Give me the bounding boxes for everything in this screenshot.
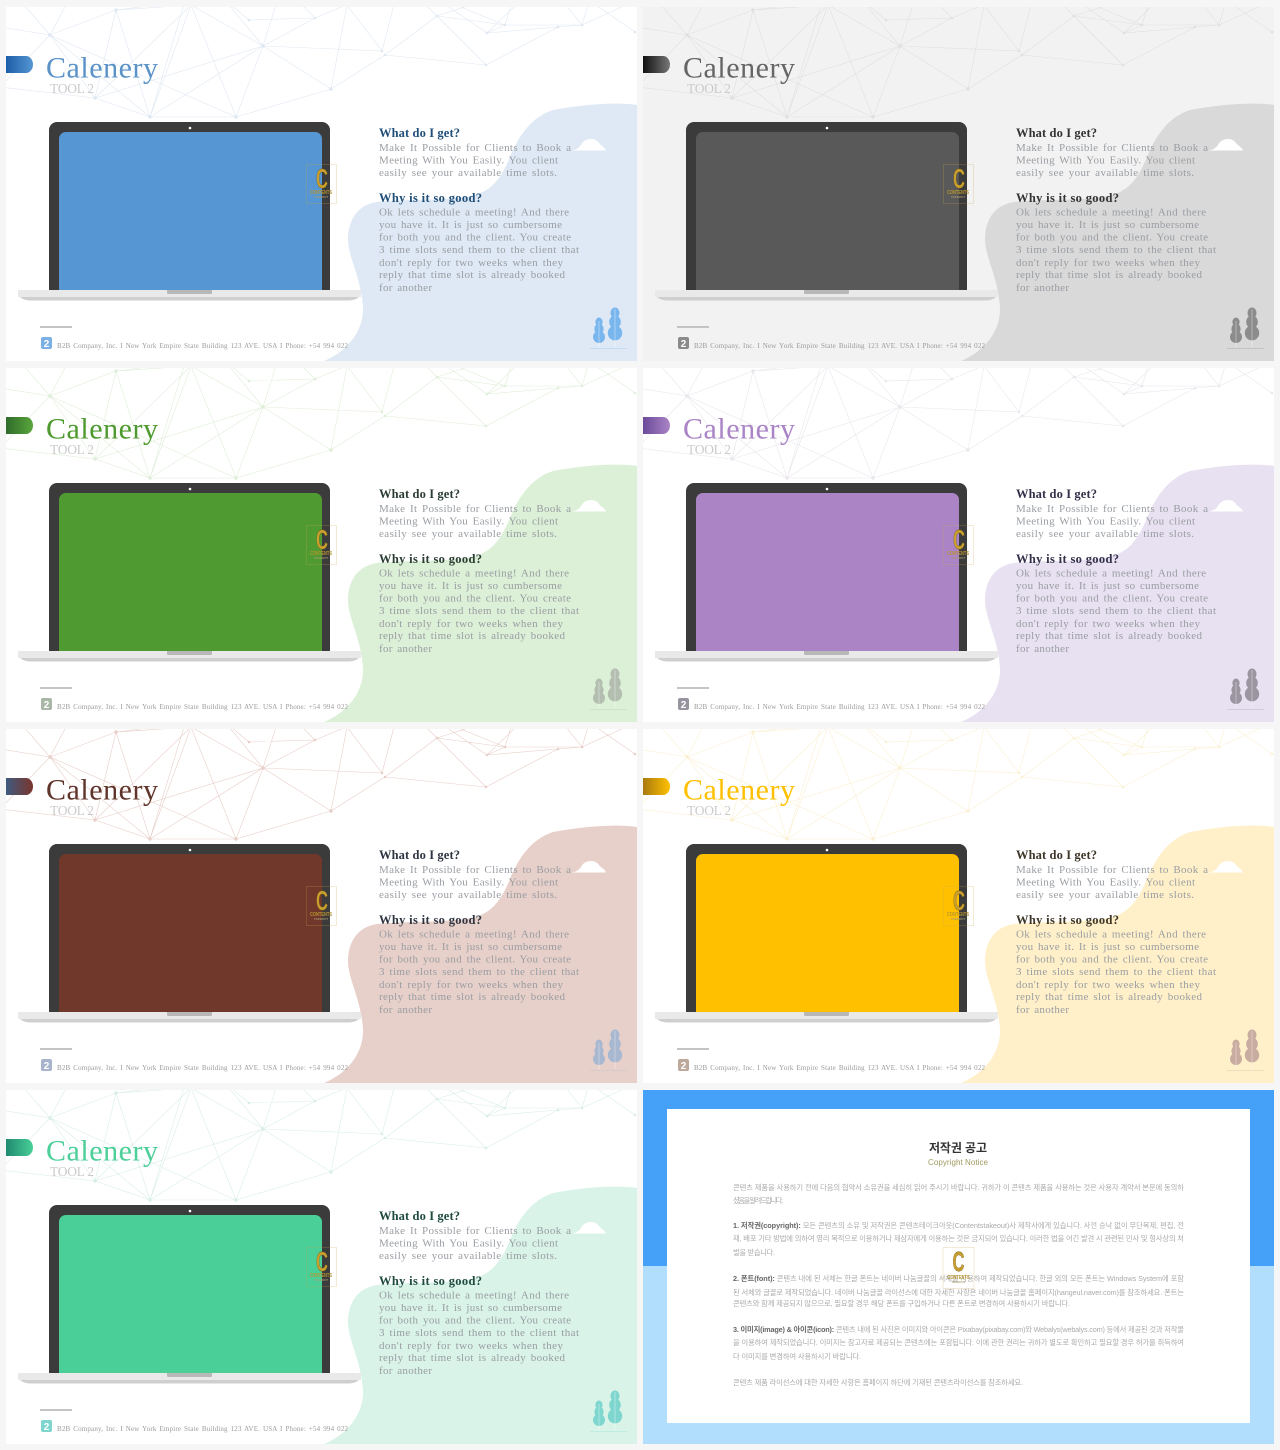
footer: 2 (44, 1422, 50, 1433)
laptop (655, 844, 998, 1022)
text block: reply that time slot is already booked (1016, 991, 1202, 1003)
watermark logo: TAKEOUT (952, 1280, 966, 1284)
subtitle: TOOL 2 (50, 81, 94, 96)
cloud icon (1208, 139, 1243, 150)
footer: 2 (681, 1061, 687, 1072)
copyright heading: 저작권 공고 (929, 1140, 987, 1155)
text block: for another (379, 282, 432, 294)
text block: reply that time slot is already booked (1016, 269, 1202, 281)
text block: for both you and the client. You create (1016, 954, 1208, 966)
text block: don't reply for two weeks when they (1016, 618, 1200, 630)
footer: 2 (681, 339, 687, 350)
text block: Ok lets schedule a meeting! And there (379, 929, 569, 941)
text block: Meeting With You Easily. You client (379, 1238, 558, 1250)
text block (379, 848, 579, 1016)
laptop (655, 122, 998, 300)
text block: Make It Possible for Clients to Book a (1016, 503, 1208, 515)
background blob (324, 465, 637, 722)
text block: you have it. It is just so cumbersome (379, 580, 562, 592)
watermark logo (944, 524, 974, 564)
network pattern (0, 5, 636, 119)
text block: Meeting With You Easily. You client (379, 877, 558, 889)
network pattern (0, 366, 636, 480)
watermark logo: C (953, 885, 965, 916)
text block: for another (379, 1004, 432, 1016)
text block: you have it. It is just so cumbersome (379, 1302, 562, 1314)
text block: What do I get? (1016, 126, 1097, 140)
copyright body text: 을 이용하여 제작되었습니다. 이미지는 참고자료 제공되는 콘텐츠에는 포함됩니다. 이에 관한 권리는 귀하가 별도로 확인하고 필요할 경우 허가를 취득하여 (733, 1338, 1184, 1347)
text block: What do I get? (379, 126, 460, 140)
watermark logo (306, 885, 336, 926)
text block: reply that time slot is already booked (379, 991, 566, 1003)
text block: don't reply for two weeks when they (1016, 257, 1200, 269)
title tab (6, 778, 33, 795)
copyright body text (733, 1183, 1184, 1387)
cloud icon (571, 500, 606, 512)
text block: Meeting With You Easily. You client (379, 155, 558, 167)
footer (40, 1048, 348, 1072)
watermark logo: CONTENTS (310, 551, 333, 557)
subtitle: TOOL 2 (687, 803, 731, 818)
slide 3: green (0, 366, 637, 722)
watermark logo: C (316, 163, 328, 194)
text block: What do I get? (379, 1209, 460, 1223)
text block: Ok lets schedule a meeting! And there (1016, 929, 1206, 941)
text block: Make It Possible for Clients to Book a (1016, 142, 1208, 154)
text block: Why is it so good? (1016, 552, 1119, 566)
text block (1016, 848, 1216, 1016)
footer: 2 (44, 700, 50, 711)
text block (379, 126, 579, 294)
watermark logo: CONTENTS (947, 190, 970, 196)
footer: B2B Company, Inc. I New York Empire State Building 123 AVE. USA I Phone: +54 994 022 (57, 1064, 348, 1072)
footer: B2B Company, Inc. I New York Empire State Building 123 AVE. USA I Phone: +54 994 022 (57, 703, 348, 711)
title: Calenery (46, 412, 158, 446)
text block: easily see your available time slots. (1016, 528, 1194, 540)
title: Calenery (683, 774, 795, 806)
watermark logo (306, 524, 336, 564)
cloud icon (571, 861, 606, 872)
text block: easily see your available time slots. (379, 167, 557, 179)
watermark logo (943, 1246, 974, 1288)
footer: B2B Company, Inc. I New York Empire State Building 123 AVE. USA I Phone: +54 994 022 (57, 342, 348, 350)
copyright subheading: Copyright Notice (928, 1158, 989, 1167)
text block: for another (1016, 1004, 1069, 1016)
text block: easily see your available time slots. (379, 889, 557, 901)
copyright body text: 재, 배포 기타 방법에 의하여 영리 목적으로 이용하거나 제삼자에게 이용하는 것은 금지되어 있습니다. 이러한 법을 어긴 발견 시 관련된 민사 및 형사상의 처 (733, 1234, 1184, 1243)
background blob (324, 826, 637, 1083)
text block: Ok lets schedule a meeting! And there (379, 568, 569, 580)
text block: 3 time slots send them to the client that (1016, 966, 1216, 978)
copyright body text: 셨음을 알려드립니다. (733, 1196, 783, 1205)
copyright body text: 3. 이미지(image) & 아이콘(icon): 콘텐츠 내에 된 사진은 이미지와 아이콘은 Pixabay(pixabay.com)와 Webalys(webalys.com) 등에서 제공된 것과 저작물 (733, 1325, 1184, 1334)
footer: B2B Company, Inc. I New York Empire State Building 123 AVE. USA I Phone: +54 994 022 (694, 342, 986, 350)
slide 2: grey (637, 5, 1274, 361)
tree icon (1227, 668, 1264, 710)
title tab (6, 1139, 33, 1156)
footer: 2 (44, 339, 50, 350)
footer (40, 1409, 348, 1433)
watermark logo: CONTENTS (310, 190, 333, 196)
title tab (643, 778, 670, 795)
text block: reply that time slot is already booked (379, 269, 566, 281)
text block: Why is it so good? (379, 191, 482, 205)
subtitle: TOOL 2 (50, 1164, 94, 1179)
text block: don't reply for two weeks when they (1016, 979, 1200, 991)
subtitle: TOOL 2 (50, 442, 94, 457)
text block: What do I get? (379, 848, 460, 862)
text block: 3 time slots send them to the client that (379, 966, 579, 978)
tree icon (590, 308, 627, 349)
text block: you have it. It is just so cumbersome (1016, 941, 1199, 953)
cloud icon (1208, 861, 1243, 872)
title: Calenery (683, 412, 795, 446)
text block: for both you and the client. You create (379, 954, 571, 966)
subtitle: TOOL 2 (687, 81, 731, 96)
text block: easily see your available time slots. (379, 1250, 557, 1262)
copyright body text: 콘텐츠와 함께 제공되지 않으므로, 필요할 경우 해당 폰트를 구입하거나 다른 폰트로 변경하여 사용하시기 바랍니다. (733, 1299, 1070, 1308)
text block: Meeting With You Easily. You client (1016, 155, 1195, 167)
text block: easily see your available time slots. (379, 528, 557, 540)
text block: Meeting With You Easily. You client (379, 516, 558, 528)
watermark logo: C (316, 885, 328, 916)
watermark logo: C (316, 1246, 328, 1277)
footer (677, 687, 986, 711)
text block: you have it. It is just so cumbersome (1016, 580, 1199, 592)
text block: don't reply for two weeks when they (379, 257, 564, 269)
title tab (6, 417, 33, 434)
text block: Why is it so good? (379, 913, 482, 927)
watermark logo: C (953, 163, 965, 194)
laptop (18, 483, 361, 662)
text block: What do I get? (1016, 848, 1097, 862)
text block: Ok lets schedule a meeting! And there (1016, 207, 1206, 219)
watermark logo: TAKEOUT (951, 917, 965, 921)
text block: 3 time slots send them to the client that (1016, 244, 1216, 256)
watermark logo: TAKEOUT (314, 556, 328, 560)
text block (379, 487, 579, 655)
text block: for another (1016, 643, 1069, 655)
text block: Make It Possible for Clients to Book a (379, 503, 571, 515)
footer: B2B Company, Inc. I New York Empire State Building 123 AVE. USA I Phone: +54 994 022 (694, 703, 986, 711)
watermark logo: TAKEOUT (314, 1278, 328, 1282)
text block: What do I get? (1016, 487, 1097, 501)
text block (379, 1209, 579, 1377)
text block: Why is it so good? (1016, 913, 1119, 927)
network pattern (637, 727, 1273, 841)
footer: 2 (681, 700, 687, 711)
copyright body text: 콘텐츠 제품을 사용하기 전에 다음의 협약서 소유권을 세심히 읽어 주시기 바랍니다. 귀하가 이 콘텐츠 제품을 사용하는 것은 사용자 계약서 본문에 동의하 (733, 1183, 1184, 1192)
watermark logo (306, 163, 336, 204)
text block: Make It Possible for Clients to Book a (379, 1225, 571, 1237)
copyright body text: 된 서체와 글꼴로 제작되었습니다. 네이버 나눔글꼴 라이선스에 대한 자세한 사항은 네이버 나눔글꼴 홈페이지(hangeul.naver.com)를 참조하세요. 폰트는 (733, 1288, 1184, 1297)
text block: don't reply for two weeks when they (379, 618, 564, 630)
text block: 3 time slots send them to the client that (1016, 605, 1216, 617)
text block: reply that time slot is already booked (379, 630, 566, 642)
title tab (6, 56, 33, 73)
title: Calenery (683, 52, 795, 84)
text block: 3 time slots send them to the client that (379, 244, 579, 256)
watermark logo: CONTENTS (310, 912, 333, 918)
text block: Meeting With You Easily. You client (1016, 516, 1195, 528)
slide 7: teal (0, 1088, 637, 1444)
text block: Ok lets schedule a meeting! And there (379, 207, 569, 219)
text block: reply that time slot is already booked (1016, 630, 1202, 642)
panel: copyright notice (643, 1090, 1274, 1444)
text block: easily see your available time slots. (1016, 889, 1194, 901)
title: Calenery (46, 52, 158, 84)
copyright body text: 2. 폰트(font): 콘텐츠 내에 된 서체는 한글 폰트는 네이버 나눔글꼴의 서체를 사용하여 제작되었습니다. 한글 외의 모든 폰트는 Windows System에 포함 (733, 1274, 1184, 1283)
tree icon (590, 1030, 627, 1071)
background blob (961, 104, 1274, 361)
text block: you have it. It is just so cumbersome (379, 941, 562, 953)
text block: for another (1016, 282, 1069, 294)
footer (677, 326, 986, 350)
footer: B2B Company, Inc. I New York Empire State Building 123 AVE. USA I Phone: +54 994 022 (694, 1064, 986, 1072)
copyright body text: 콘텐츠 제품 라이선스에 대한 자세한 사항은 홈페이지 하단에 기재된 콘텐츠라이선스를 참조하세요. (733, 1378, 1023, 1387)
text block: you have it. It is just so cumbersome (1016, 219, 1199, 231)
text block: Ok lets schedule a meeting! And there (1016, 568, 1206, 580)
slide 5: brown (0, 727, 637, 1083)
laptop (655, 483, 998, 662)
copyright body text: 다 이미지를 변경하여 사용하시기 바랍니다. (733, 1352, 861, 1361)
tree icon (590, 668, 627, 710)
laptop (18, 844, 361, 1022)
text block: don't reply for two weeks when they (379, 979, 564, 991)
text block: 3 time slots send them to the client that (379, 1327, 579, 1339)
watermark logo (306, 1246, 336, 1286)
text block: for both you and the client. You create (1016, 593, 1208, 605)
cloud icon (571, 139, 606, 150)
footer (677, 1048, 986, 1072)
copyright body text: 1. 저작권(copyright): 모든 콘텐츠의 소유 및 저작권은 콘텐츠테이크아웃(Contentstakeout)사 제작사에게 있습니다. 사전 승낙 없이 무단복제, 편집, 전 (733, 1221, 1184, 1230)
cloud icon (1208, 500, 1243, 512)
watermark logo: TAKEOUT (314, 917, 328, 921)
text block: for another (379, 643, 432, 655)
title tab (643, 417, 670, 434)
text block: Make It Possible for Clients to Book a (379, 864, 571, 876)
text block: for another (379, 1365, 432, 1377)
background blob (961, 465, 1274, 722)
text block: reply that time slot is already booked (379, 1352, 566, 1364)
network pattern (637, 366, 1273, 480)
text block: Ok lets schedule a meeting! And there (379, 1290, 569, 1302)
text block: Make It Possible for Clients to Book a (379, 142, 571, 154)
watermark logo: TAKEOUT (314, 195, 328, 199)
footer: B2B Company, Inc. I New York Empire State Building 123 AVE. USA I Phone: +54 994 022 (57, 1425, 348, 1433)
title: Calenery (46, 1134, 158, 1168)
slide 6: yellow (637, 727, 1274, 1083)
slide 1: blue (0, 5, 637, 361)
text block: Make It Possible for Clients to Book a (1016, 864, 1208, 876)
cloud icon (571, 1222, 606, 1234)
watermark logo: C (953, 524, 965, 555)
network pattern (0, 727, 636, 841)
watermark logo: CONTENTS (948, 1275, 970, 1281)
network pattern (0, 1088, 636, 1202)
text block: for both you and the client. You create (1016, 232, 1208, 244)
tree icon (590, 1390, 627, 1432)
text block: 3 time slots send them to the client that (379, 605, 579, 617)
text block: easily see your available time slots. (1016, 167, 1194, 179)
tree icon (1227, 308, 1264, 349)
text block: Why is it so good? (1016, 191, 1119, 205)
watermark logo: C (952, 1246, 964, 1277)
text block (1016, 487, 1216, 655)
text block: don't reply for two weeks when they (379, 1340, 564, 1352)
subtitle: TOOL 2 (687, 442, 731, 457)
watermark logo: TAKEOUT (951, 556, 965, 560)
text block: for both you and the client. You create (379, 593, 571, 605)
title tab (643, 56, 670, 73)
watermark logo: CONTENTS (947, 912, 970, 918)
text block: you have it. It is just so cumbersome (379, 219, 562, 231)
text block (1016, 126, 1216, 294)
watermark logo: CONTENTS (310, 1273, 333, 1279)
text block: for both you and the client. You create (379, 1315, 571, 1327)
watermark logo: CONTENTS (947, 551, 970, 557)
slide 4: purple (637, 366, 1274, 722)
title: Calenery (46, 774, 158, 806)
text block: for both you and the client. You create (379, 232, 571, 244)
text block: Why is it so good? (379, 1274, 482, 1288)
watermark logo (944, 163, 974, 204)
tree icon (1227, 1030, 1264, 1071)
background blob (324, 1187, 637, 1444)
text block: Meeting With You Easily. You client (1016, 877, 1195, 889)
footer: 2 (44, 1061, 50, 1072)
footer (40, 326, 348, 350)
network pattern (637, 5, 1273, 119)
footer (40, 687, 348, 711)
copyright body text: 벌을 받습니다. (733, 1248, 775, 1257)
background blob (324, 104, 637, 361)
laptop (18, 122, 361, 300)
watermark logo (944, 885, 974, 926)
background blob (961, 826, 1274, 1083)
subtitle: TOOL 2 (50, 803, 94, 818)
laptop (18, 1205, 361, 1384)
text block: What do I get? (379, 487, 460, 501)
watermark logo: TAKEOUT (951, 195, 965, 199)
text block: Why is it so good? (379, 552, 482, 566)
watermark logo: C (316, 524, 328, 555)
